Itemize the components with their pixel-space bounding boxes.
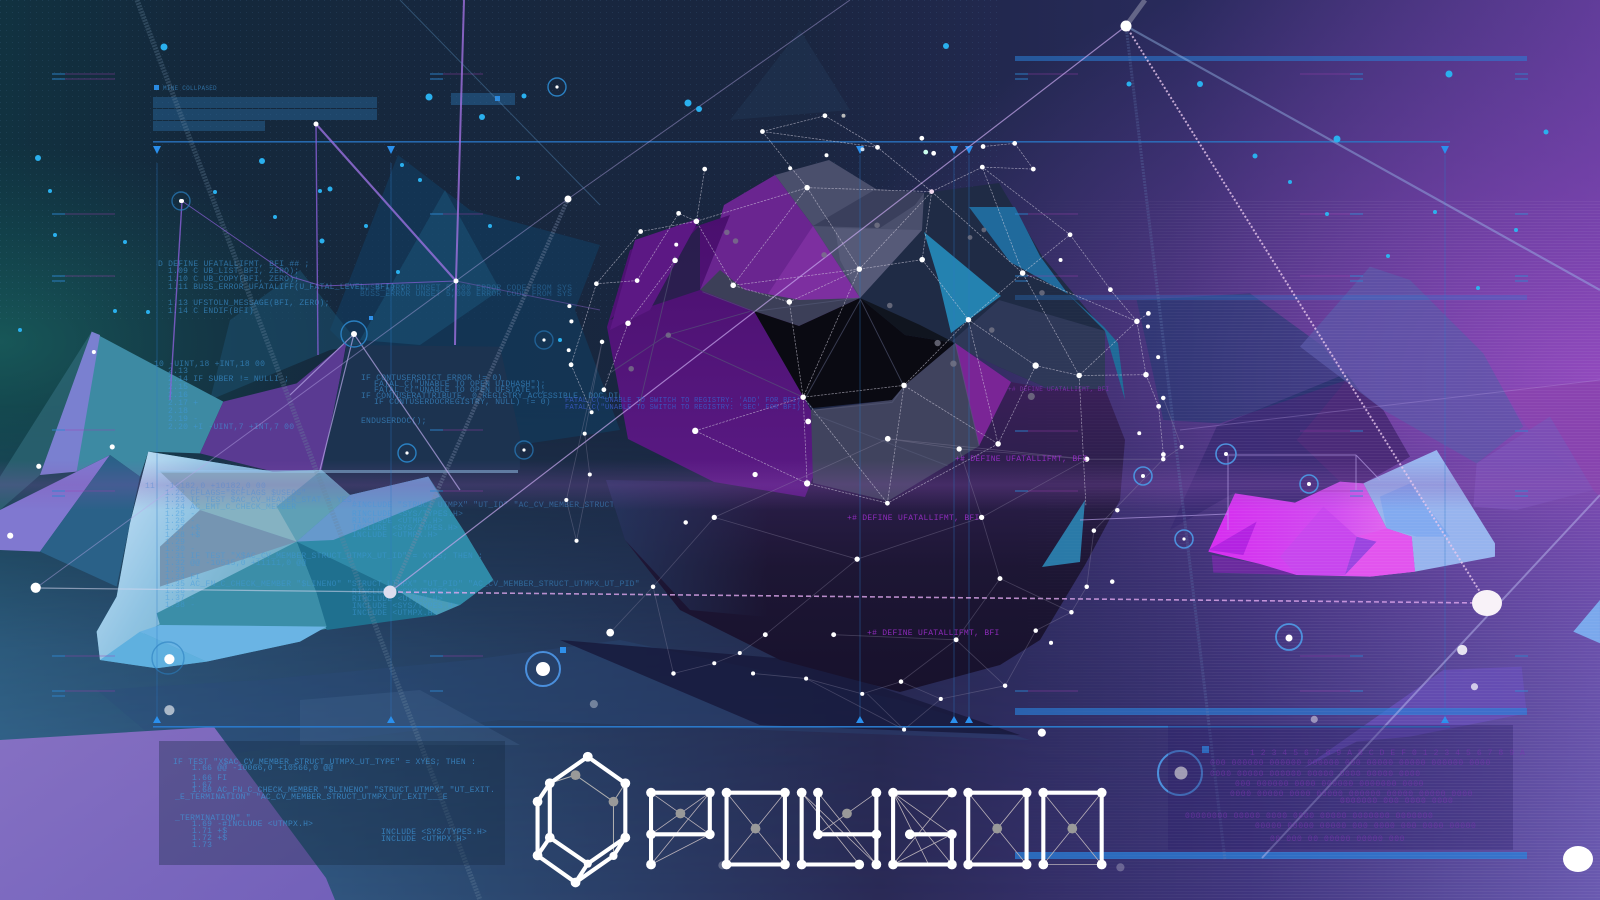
panel: bottom right magenta code: 0000 00000 000000 00000 0000 00000 0000 (1210, 770, 1421, 779)
bottom left lilac polygon (0, 727, 335, 900)
panel: code over teal rock: 1.27 +$ (165, 524, 200, 533)
panel: code over teal rock: RINCLUDE <SYS/TYPES.H> (352, 510, 463, 519)
panel: bottom left code: IF TEST "X$AC_CV_MEMBER_STRUCT_UTMPX_UT_TYPE" = XYES; THEN : (173, 758, 476, 767)
panel: code over teal rock: 1.28 +$ (165, 531, 200, 540)
panel: code over teal rock: 1.35 AC_FN_C_CHECK_MEMBER "$LINENO" "STRUCT UTMPX" "UT_PID" "AC_CV_MEMBER_STRUCT_UTMPX_UT_PID" (165, 580, 640, 589)
panel: code over teal rock: INCLUDE <SYS/TYPES.H> (352, 524, 458, 533)
panel: bottom left code: _TERMINATION" " (174, 814, 251, 823)
panel: left code lines upper: D DEFINE UFATALLIFMT, BFI ## ; (158, 260, 310, 269)
main teal rock (97, 452, 493, 668)
panel: bottom left code: 1.73 (192, 841, 212, 850)
panel: bottom left code: 1.66 FI (192, 774, 227, 783)
panel: code over teal rock: 1.30 - (165, 545, 195, 554)
panel: bottom left code: 1.71 +$ (192, 827, 227, 836)
magenta define labels: FATAL_C("UNABLE TO SWITCH TO REGISTRY: 'SEC' FOR BFI) (565, 404, 801, 412)
panel: code over teal rock: 1.31 IF TEST "X$AC_CV_MEMBER_STRUCT_UTMPX_UT_ID" = XYES; THEN : (165, 552, 483, 561)
panel: left code lines upper: 1.09 C UB_LIST BFI, ZERO); (168, 267, 299, 276)
panel: left code lines upper: 10 -UINT,18 +INT,18 00 (154, 360, 265, 369)
panel: code over teal rock (145, 470, 680, 618)
dark blue background mountains (210, 30, 850, 455)
panel: bottom right magenta code: 00000 00000 00000 000 0000 000 0000 00000 (1255, 822, 1476, 831)
panel: left code lines upper: 2.16 (168, 391, 188, 400)
panel: left code lines upper: 2.13 (168, 367, 188, 376)
panel: code over teal rock: 1.33 (165, 566, 185, 575)
top left blue block text: MINE COLLPASED (163, 85, 217, 92)
sphere nodes upper (567, 113, 1166, 506)
logo: polygon wordmark (533, 752, 1107, 887)
sphere wire mesh upper (571, 116, 1163, 505)
panel: code over teal rock: INCLUDE <UTMPX.H> (352, 609, 438, 618)
panel: left code lines upper: FATAL_C("UNABLE TO OPEN UIDHASH"); (374, 380, 546, 389)
panel: bottom right magenta code: 000 000000 000000 000000 000 00000 00000 000000 0000 (1210, 759, 1491, 768)
panel: left code lines upper: 1.13 UFSTOLN_MESSAGE(BFI, ZERO); (168, 299, 330, 308)
panel: bottom right magenta code: 00 000 00 00000 00000 000 (1270, 835, 1405, 844)
panel: bottom left code: 1.69 -#INCLUDE <UTMPX.H> (192, 820, 313, 829)
panel: code over teal rock: 1.29 (165, 538, 185, 547)
panel: left code lines upper: 1.11 BUSS_ERROR_UFATALIFF(U_FATAL_LEVEL, BFI) ; (168, 283, 405, 292)
blue frame lines and markers (153, 56, 1527, 859)
panel: code over teal rock: RINCLUDE <UTMPX.H> (352, 517, 443, 526)
panel: code over teal rock: 11 (145, 482, 155, 491)
panel: code over teal rock: INCLUDE <SYS/TYPES.H> (352, 602, 458, 611)
top left blue block text (153, 85, 515, 131)
panel: code over teal rock: 1.24 AC_EMT_C_CHECK_MEMBER (165, 503, 296, 512)
panel: bottom left code: 1.68 AC_FN_C_CHECK_MEMBER "$LINENO" "STRUCT UTMPX" "UT_EXIT. (192, 786, 495, 795)
panel: left code lines upper: 1.14 C ENDIF(BFI) (168, 307, 254, 316)
panel: code over teal rock: INCLUDE <UTMPX.H> (352, 531, 438, 540)
panel: code over teal rock: 1.36 - (165, 587, 195, 596)
panel: code over teal rock: 1.22 CFLAGS="$CFLAGS $USEOS" (165, 489, 306, 498)
panel: bottom left code: 1.67 (192, 781, 212, 790)
small tick marks (52, 74, 1528, 696)
panel: left code lines upper: 2.17 + (168, 399, 198, 408)
panel: bottom left code: 1.66 @@ -10066,0 +10566,0 @@ (192, 764, 333, 773)
letters (646, 788, 1107, 869)
sphere nodes lower (7, 304, 1478, 871)
panel: code over teal rock: -10182,0 +10182,0 00 (165, 482, 266, 491)
panel: bottom left code: INCLUDE <UTMPX.H> (381, 835, 467, 844)
floor shadows and reflections (97, 640, 1030, 760)
panel: left code lines upper: FATAL_C("UNABLE TO OPEN UFSTATE"); (374, 386, 546, 395)
panel: code over teal rock: #INCLUDE "STRUCT UTMPX" "UT_ID" "AC_CV_MEMBER_STRUCT_UTMPX_UT_ID" (352, 501, 680, 510)
panel: bottom left code (159, 741, 505, 865)
sphere (606, 160, 1125, 692)
panel: bottom right magenta code: 0000000 000 0000 0000 (1340, 797, 1453, 806)
magenta define labels (565, 386, 1109, 638)
panel: left code lines upper: 2.15 (168, 383, 188, 392)
magenta define labels: +# DEFINE UFATALLIFMT, BFI (867, 629, 1000, 638)
panel: code over teal rock: 1.25 - (165, 510, 195, 519)
panel: bottom right magenta code: 1 2 3 4 5 6 7 8 9 A B C D E F 0 1 2 3 4 5 6 7 8 9 A (1250, 749, 1525, 758)
panel: bottom left code: _E_TERMINATION" "AC_CV_MEMBER_STRUCT_UTMPX_UT_EXIT___E (174, 793, 448, 802)
panel: left code lines upper: IF CONTUSERSDICT_ERROR != 0) (361, 374, 502, 383)
panel: bottom right magenta code: 000 000000 0000 000000 0000000 0000 (1235, 780, 1424, 789)
network lines (36, 0, 1600, 603)
panel: code over teal rock: RINCLUDE <SYS/TYPES.H> (352, 588, 463, 597)
lower dark hemisphere (606, 382, 1125, 692)
magenta define labels: FATAL_C("UNABLE TO SWITCH TO REGISTRY: 'ADD' FOR BFI) (565, 397, 801, 405)
right mountains (1137, 267, 1600, 768)
left rocks (0, 332, 520, 587)
magenta rock (1208, 450, 1495, 577)
panel: code over teal rock: RINCLUDE <UTMPX.H> (352, 595, 443, 604)
panel: left code lines upper: 1.10 C UB_COPY(BFI, ZERO); (168, 275, 299, 284)
panel: code over teal rock: 1.38 - (165, 601, 195, 610)
ring nodes (152, 78, 1318, 795)
panel: left code lines upper: ENDUSERDOC(); (361, 417, 427, 426)
cyan star dots (18, 43, 1548, 342)
scanline overlay on right (1193, 201, 1600, 898)
magenta define labels: +# DEFINE UFATALLIFMT, BFI (1008, 386, 1109, 393)
panel: left code lines upper: 2.20 +I -UINT,7 +INT,7 00 (168, 423, 294, 432)
panel: left code lines upper: 2.18 (168, 407, 188, 416)
panel: bottom right magenta code: 0000 00000 0000 00000 000000 00000 00000 0000 (1230, 790, 1473, 799)
panel: code over teal rock: 1.34 FI (165, 573, 200, 582)
logo icon: hexagon (533, 752, 630, 887)
horizontal purple glow band (0, 460, 1600, 510)
panel: bottom left code: 1.72 +$ (192, 834, 227, 843)
panel: left code lines upper: BUSS_ERROR UNSET 5,000 ERROR CODE FROM SYS (360, 284, 572, 293)
magenta define labels: +# DEFINE UFATALLIFMT, BFI (847, 514, 980, 523)
panel: left code lines upper (154, 260, 624, 432)
panel: bottom right magenta code: 00000000 00000 0000 0000 00000 0000000 0000000 (1185, 812, 1433, 821)
panel: bottom right magenta code (1168, 725, 1525, 850)
panel: code over teal rock: 1.32 @@ -10515,0 +11111,0 @@ (165, 559, 306, 568)
panel: left code lines upper: BUSS_ERROR UNSET 5,000 ERROR CODE FROM SYS (360, 290, 572, 299)
panel: code over teal rock: 1.26 - (165, 517, 195, 526)
panel: left code lines upper: 2.19 - (168, 415, 198, 424)
panel: bottom left code: INCLUDE <SYS/TYPES.H> (381, 828, 487, 837)
panel: code over teal rock: 1.37 - (165, 594, 195, 603)
panel: code over teal rock: 1.23 IF TEST $AC_CV_HEADER_STAT = YES; (165, 496, 357, 505)
panel: left code lines upper: IF CONTUSERATTRIBUTE, 0_REGISTRY_ACCESSIBLE, DOC_DIR (361, 392, 624, 401)
panel: left code lines upper: IF CONTUSERDOCREGISTRY, NULL) != 0) (374, 398, 551, 407)
magenta define labels: +# DEFINE UFATALLIFMT, BFI (955, 455, 1088, 464)
panel: left code lines upper: 2.14 IF SUBER != NULLI ; (168, 375, 289, 384)
sphere wire mesh lower (566, 342, 1182, 730)
